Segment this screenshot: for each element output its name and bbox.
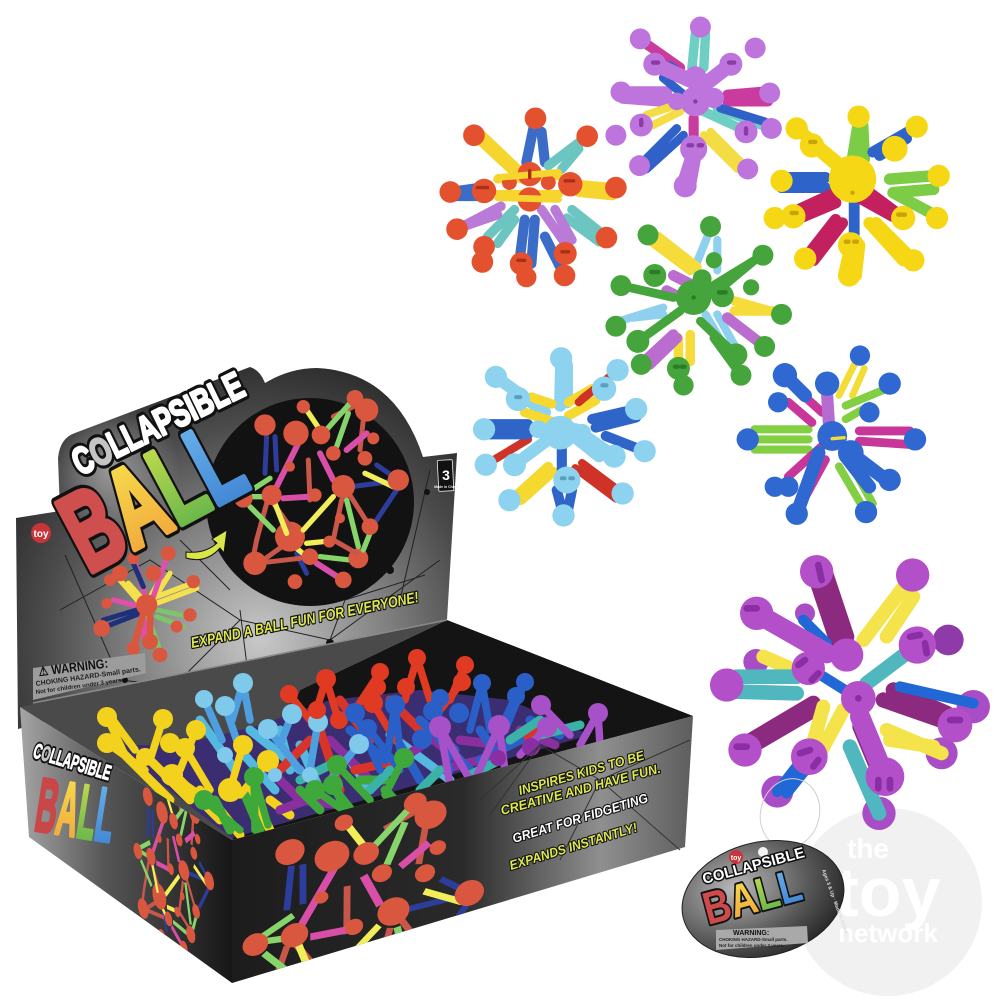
front box panel: GREAT FOR FIDGETING [510, 790, 650, 846]
watermark: the toy network [794, 808, 982, 996]
left panel collapsible [31, 740, 114, 785]
tagline: EXPAND A BALL FUN FOR EVERYONE! [189, 589, 420, 652]
spokes: yellow toys [107, 717, 268, 795]
ball holes [737, 565, 960, 788]
hang tag: CHOKING HAZARD-Small parts. [719, 937, 788, 942]
display box [16, 365, 693, 1000]
watermark: the toy network: toy [836, 853, 941, 931]
black circle [206, 398, 414, 606]
tag ball word: BALL [697, 859, 807, 935]
front box panel [232, 716, 693, 1000]
watermark: the toy network: the [847, 833, 889, 864]
colourful spoke mass [110, 700, 580, 835]
collapsed ball illustration [93, 546, 200, 662]
hang tag: WARNING: [733, 930, 769, 937]
balls inside the box [97, 649, 608, 838]
front box panel: CREATIVE AND HAVE FUN. [499, 761, 662, 818]
toy: yellow ball [764, 105, 950, 287]
string loop [753, 772, 827, 855]
toy: blue ball [737, 345, 926, 525]
hang tag: Not for children under 3 years. [719, 943, 784, 948]
toy: light blue ball [473, 347, 656, 527]
left panel collapsible: COLLAPSIBLE [31, 740, 114, 785]
tag toy badge [729, 850, 743, 864]
tag warning [716, 926, 808, 950]
watermark: the toy network: network [838, 918, 938, 948]
left panel ball: BALL [30, 763, 121, 859]
tag title: COLLAPSIBLE [701, 844, 806, 888]
tag side text: Ages 3 & Up · Made in China [820, 869, 849, 935]
title: ball: BALL [41, 398, 263, 595]
lid toy badge: toy [34, 529, 49, 540]
left box panel [20, 707, 232, 983]
age badge: 3 [442, 467, 450, 483]
purple balls [710, 555, 972, 796]
age badge [434, 460, 458, 491]
hang tag: toy [731, 855, 741, 862]
contents base mass [110, 690, 590, 838]
six toy balls [439, 17, 950, 527]
feature text: INSPIRES KIDS TO BE [517, 748, 646, 798]
left panel collapsible: COLLAPSIBLE [31, 740, 114, 785]
header lid [16, 365, 458, 729]
lid toy badge [31, 523, 51, 543]
hang tag [670, 825, 856, 973]
expanded ball illustration [234, 390, 409, 589]
warning label: ⚠ WARNING: [38, 656, 109, 679]
front box panel: EXPANDS INSTANTLY! [507, 819, 640, 873]
title: collapsible: COLLAPSIBLE [66, 365, 251, 484]
arrow [186, 530, 227, 560]
title: ball: BALL [41, 398, 263, 595]
spokes [737, 575, 990, 830]
title: collapsible: COLLAPSIBLE [66, 365, 251, 484]
large purple toy with hang tag [710, 555, 990, 855]
warning label: Not for children under 3 years. [35, 678, 124, 696]
title: collapsible [66, 365, 251, 484]
age badge: Made in China [434, 485, 458, 489]
toy: red ball [439, 107, 627, 287]
warning label [33, 653, 146, 700]
toy: purple ball [605, 17, 782, 197]
warning label: CHOKING HAZARD-Small parts. [35, 666, 141, 688]
toy: green ball [605, 216, 792, 395]
box interior [20, 620, 693, 840]
